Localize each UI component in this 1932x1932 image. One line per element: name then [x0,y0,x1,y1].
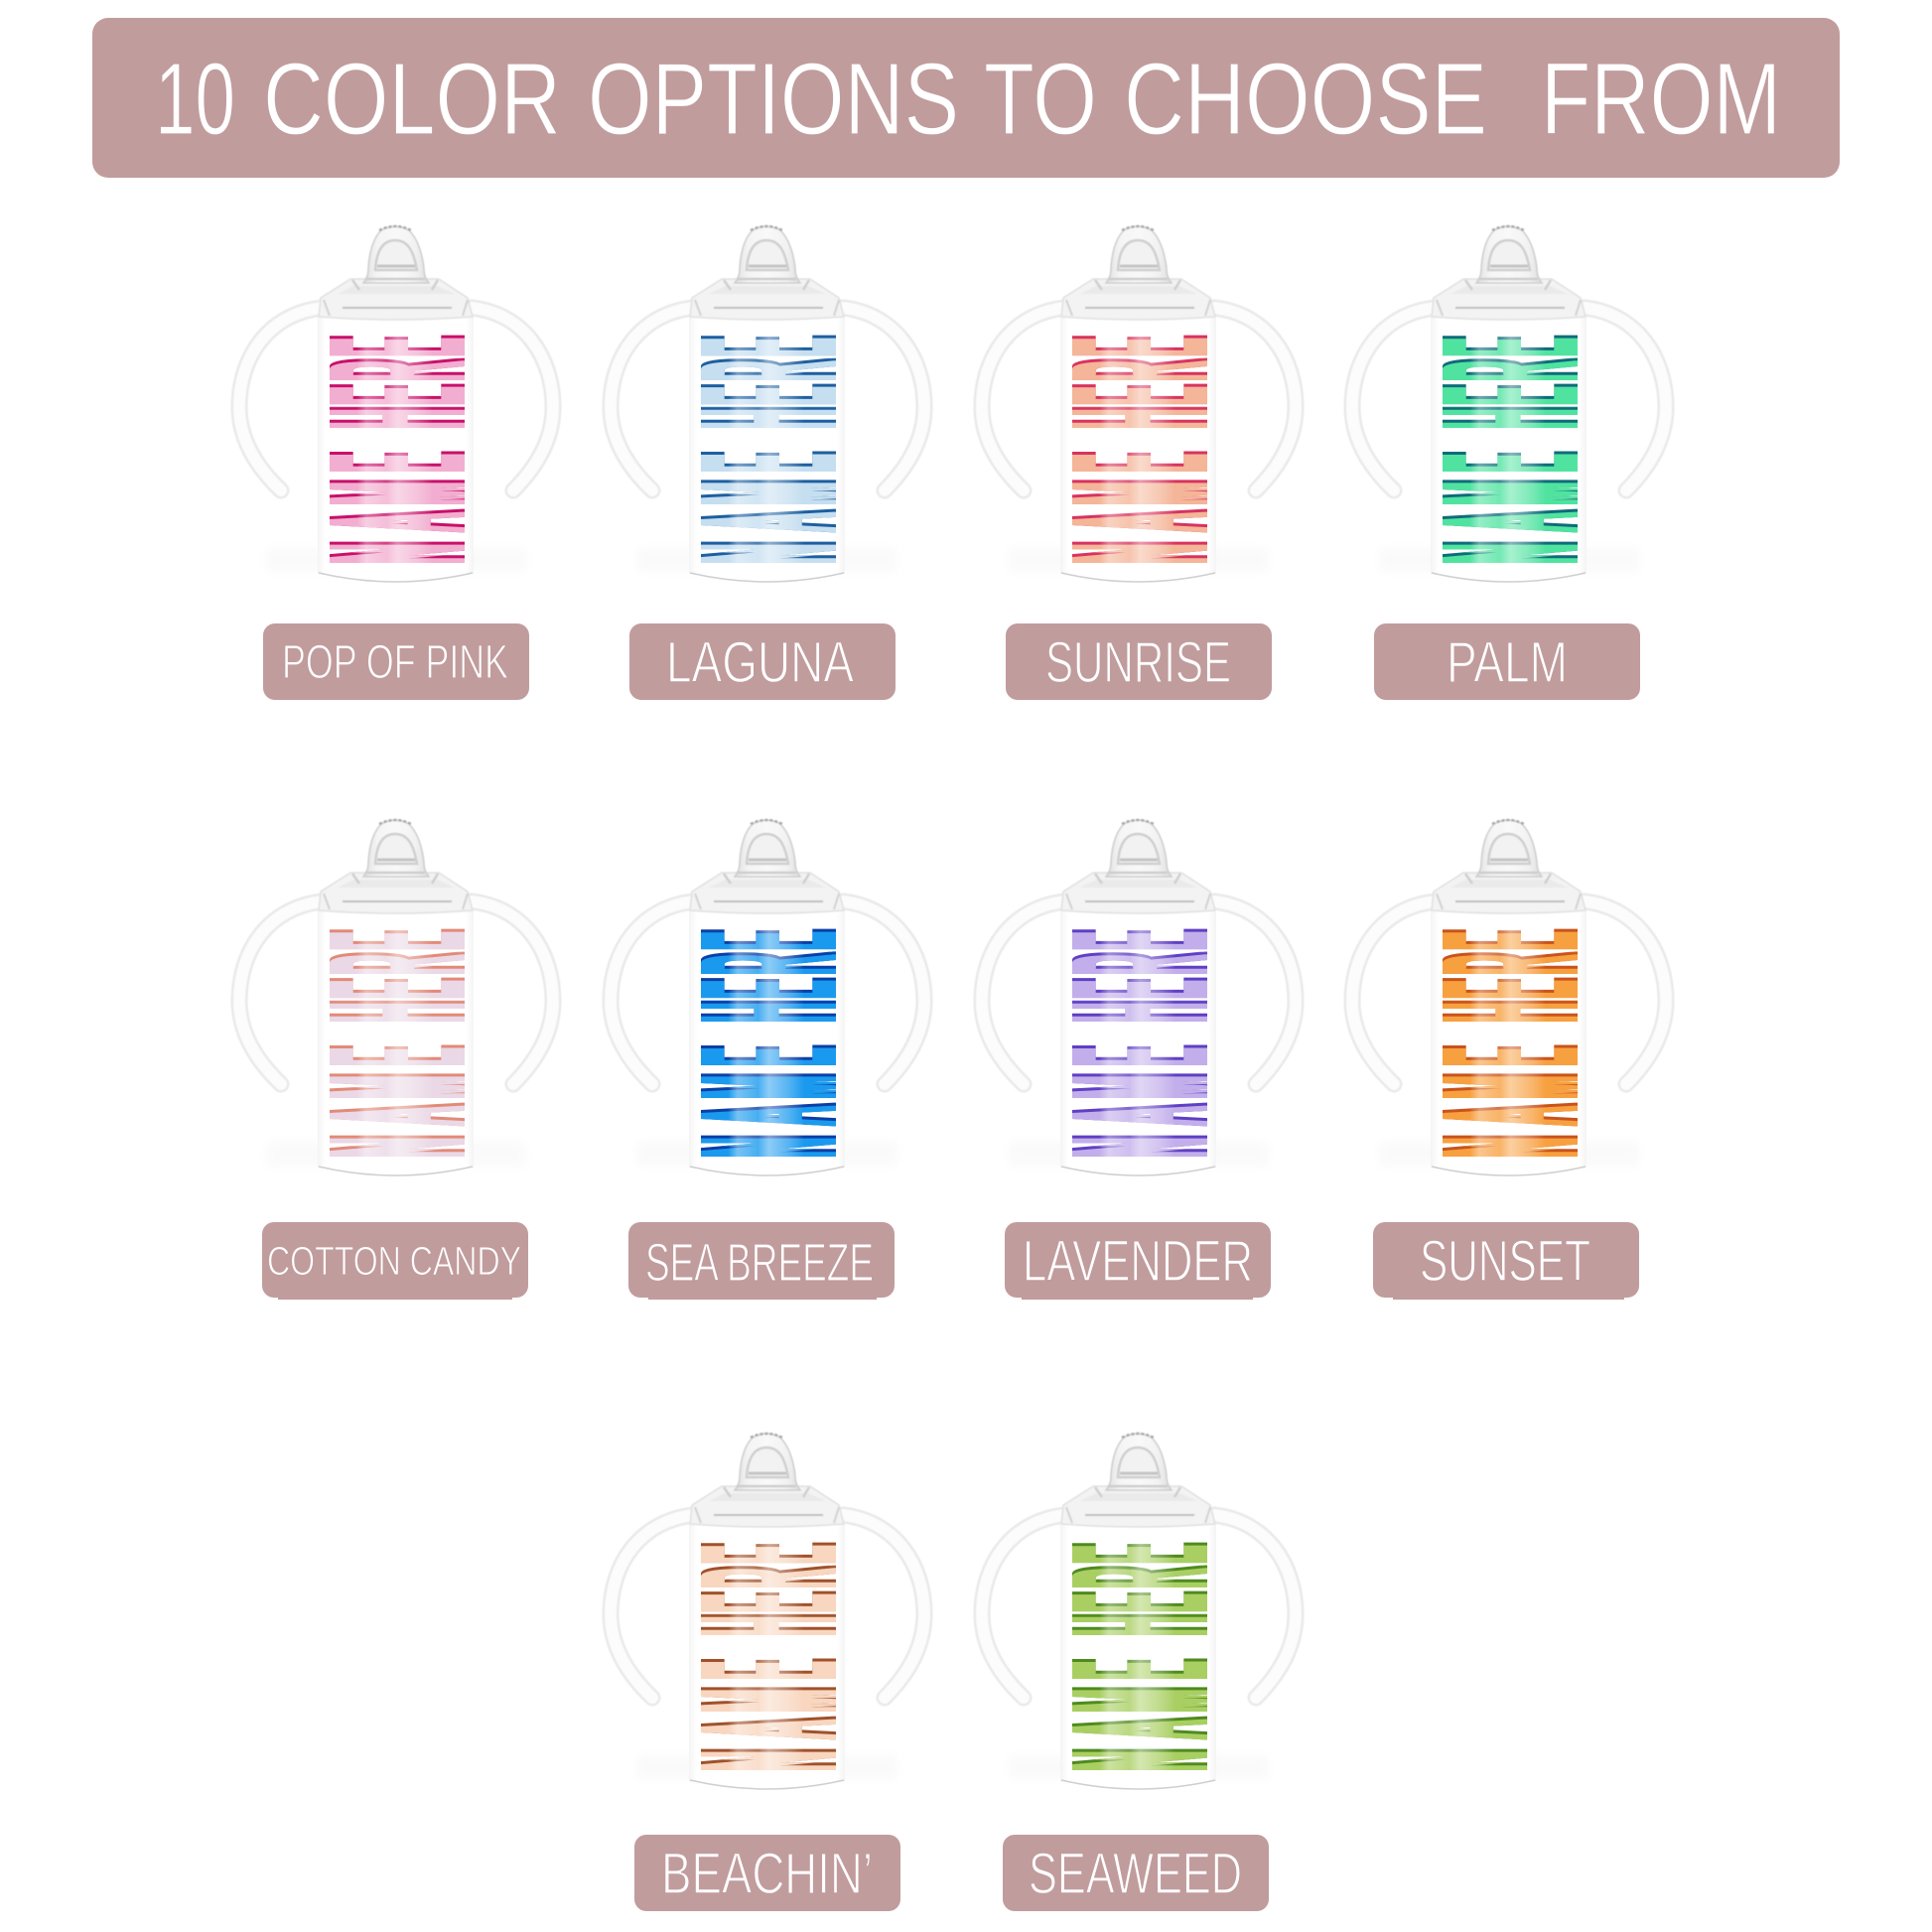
lid and spout [1061,1434,1215,1527]
name print: NAME HERE [289,929,505,1157]
cup handles and body [1352,308,1666,583]
label: beachin: BEACHIN’ [661,1842,873,1906]
product: lavender cup [982,820,1296,1176]
name print: NAME HERE [660,336,877,563]
name print: NAME HERE [660,1543,877,1770]
title text [155,42,1781,156]
label: laguna: LAGUNA [666,630,854,695]
label: cotton candy: COTTON CANDY [267,1238,521,1284]
title text: TO [984,42,1097,156]
label: sunrise: SUNRISE [1045,630,1231,695]
cup handles and body [982,1515,1296,1790]
title text: FROM [1541,42,1781,156]
name print: NAME HERE [1402,336,1618,563]
label: sea breeze [628,1222,895,1300]
product: sea breeze cup [611,820,924,1176]
name print: NAME HERE [1402,929,1618,1157]
product: beachin cup [611,1434,924,1790]
lid and spout [1432,820,1586,913]
name print: NAME HERE [1032,336,1248,563]
lid and spout [319,226,473,320]
product: cotton candy cup [239,820,553,1176]
name print: NAME HERE [1032,929,1248,1157]
name print: NAME HERE [660,929,877,1157]
lid and spout [1061,226,1215,320]
cup handles and body [982,901,1296,1176]
label: seaweed [1003,1835,1269,1911]
label: lavender [1005,1222,1271,1300]
body highlight [330,927,466,1159]
cup handles and body [239,901,553,1176]
name print: NAME HERE [660,336,877,563]
name print: NAME HERE [660,1543,877,1770]
label: beachin [634,1835,900,1911]
product: sunrise cup [982,226,1296,583]
product: sunset cup [1352,820,1666,1176]
name print: NAME HERE [289,336,505,563]
title text: 10 [155,42,235,156]
label: cotton candy [262,1222,528,1300]
body highlight [1443,334,1579,565]
body highlight [701,927,837,1159]
body highlight [701,334,837,565]
name print: NAME HERE [1402,929,1618,1157]
cup handles and body [982,308,1296,583]
label: sunset [1373,1222,1639,1300]
body highlight [1072,1541,1208,1772]
product: pop of pink cup [239,226,553,583]
body highlight [330,334,466,565]
product: laguna cup [611,226,924,583]
name print: NAME HERE [1032,929,1248,1157]
product: palm cup [1352,226,1666,583]
label: seaweed: SEAWEED [1029,1842,1242,1906]
label: palm: PALM [1447,630,1568,695]
cup handles and body [1352,901,1666,1176]
lid and spout [1432,226,1586,320]
name print: NAME HERE [289,929,505,1157]
label: sea breeze: SEA BREEZE [645,1233,874,1293]
label: palm [1374,623,1640,700]
title banner [92,18,1840,178]
lid and spout [690,226,844,320]
name print: NAME HERE [1032,1543,1248,1770]
cup handles and body [239,308,553,583]
body highlight [1443,927,1579,1159]
label: pop of pink: POP OF PINK [282,636,508,689]
name print: NAME HERE [660,929,877,1157]
title text: COLOR [263,42,561,156]
name print: NAME HERE [1032,336,1248,563]
cup handles and body [611,308,924,583]
name print: NAME HERE [1402,336,1618,563]
name print: NAME HERE [1032,1543,1248,1770]
body highlight [1072,334,1208,565]
cup handles and body [611,901,924,1176]
name print: NAME HERE [289,336,505,563]
lid and spout [319,820,473,913]
label: sunset: SUNSET [1420,1229,1590,1294]
cup handles and body [611,1515,924,1790]
label: sunrise [1006,623,1272,700]
product: seaweed cup [982,1434,1296,1790]
body highlight [1072,927,1208,1159]
body highlight [701,1541,837,1772]
lid and spout [690,1434,844,1527]
label: pop of pink [263,623,529,700]
title text: CHOOSE [1124,42,1487,156]
title text: OPTIONS [588,42,959,156]
label: lavender: LAVENDER [1023,1229,1253,1294]
lid and spout [1061,820,1215,913]
lid and spout [690,820,844,913]
